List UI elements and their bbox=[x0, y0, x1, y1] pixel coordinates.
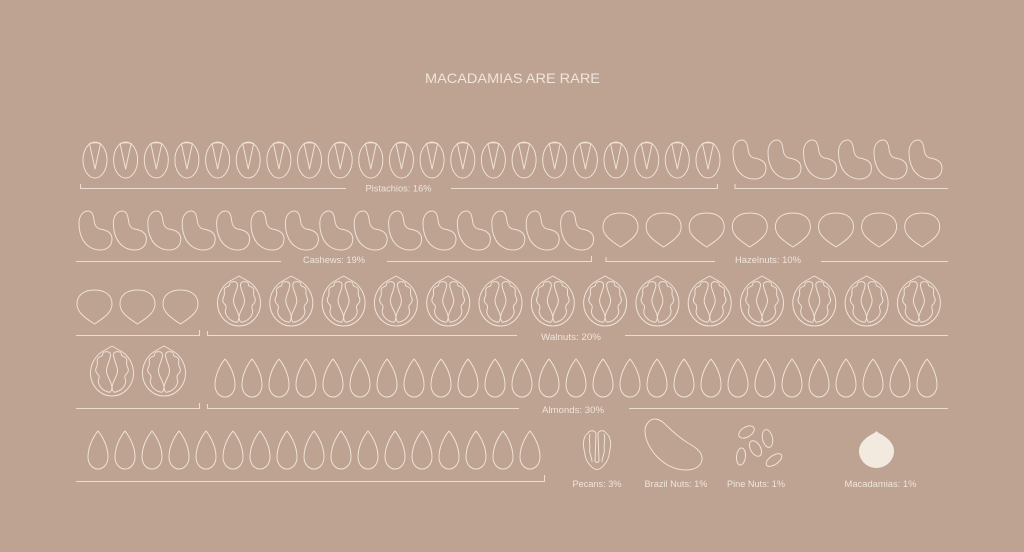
almond icons, row 4 bbox=[215, 359, 937, 397]
hazelnuts bracket, row 3 bbox=[76, 330, 200, 336]
icon: pecan bbox=[583, 431, 611, 470]
cashew icons, row 2 bbox=[79, 211, 594, 250]
walnuts bracket bbox=[208, 331, 948, 336]
almonds bracket bbox=[208, 404, 948, 408]
macadamias label: Macadamias: 1% bbox=[844, 479, 916, 489]
walnut icons, row 3 bbox=[218, 276, 940, 326]
walnuts bracket, row 4 bbox=[76, 403, 200, 408]
almonds label: Almonds: 30% bbox=[542, 405, 604, 415]
icon: pine nuts bbox=[736, 423, 784, 469]
hazelnut icons, row 2 bbox=[603, 213, 940, 247]
pine nuts label: Pine Nuts: 1% bbox=[727, 479, 785, 489]
cashews bracket, row 1 bbox=[735, 184, 948, 188]
pistachio icons bbox=[83, 142, 720, 178]
cashew icons, row 1 bbox=[733, 140, 942, 179]
pistachios bracket bbox=[80, 184, 718, 188]
pistachios label: Pistachios: 16% bbox=[366, 184, 432, 194]
brazil nuts label: Brazil Nuts: 1% bbox=[644, 479, 708, 489]
walnut icons, row 4 bbox=[90, 346, 186, 396]
icon: brazil nut bbox=[645, 419, 702, 470]
cashews label: Cashews: 19% bbox=[303, 255, 365, 265]
hazelnuts label: Hazelnuts: 10% bbox=[735, 255, 801, 265]
almonds bracket, row 5 bbox=[76, 475, 544, 482]
icon: macadamia bbox=[859, 431, 894, 468]
title: MACADAMIAS ARE RARE bbox=[425, 70, 600, 86]
almond icons, row 5 bbox=[88, 431, 540, 469]
hazelnut icons, row 3 bbox=[77, 290, 198, 324]
cashews bracket, row 2 bbox=[76, 256, 592, 262]
hazelnuts bracket bbox=[606, 257, 948, 262]
walnuts label: Walnuts: 20% bbox=[541, 332, 601, 342]
pecans label: Pecans: 3% bbox=[572, 479, 622, 489]
